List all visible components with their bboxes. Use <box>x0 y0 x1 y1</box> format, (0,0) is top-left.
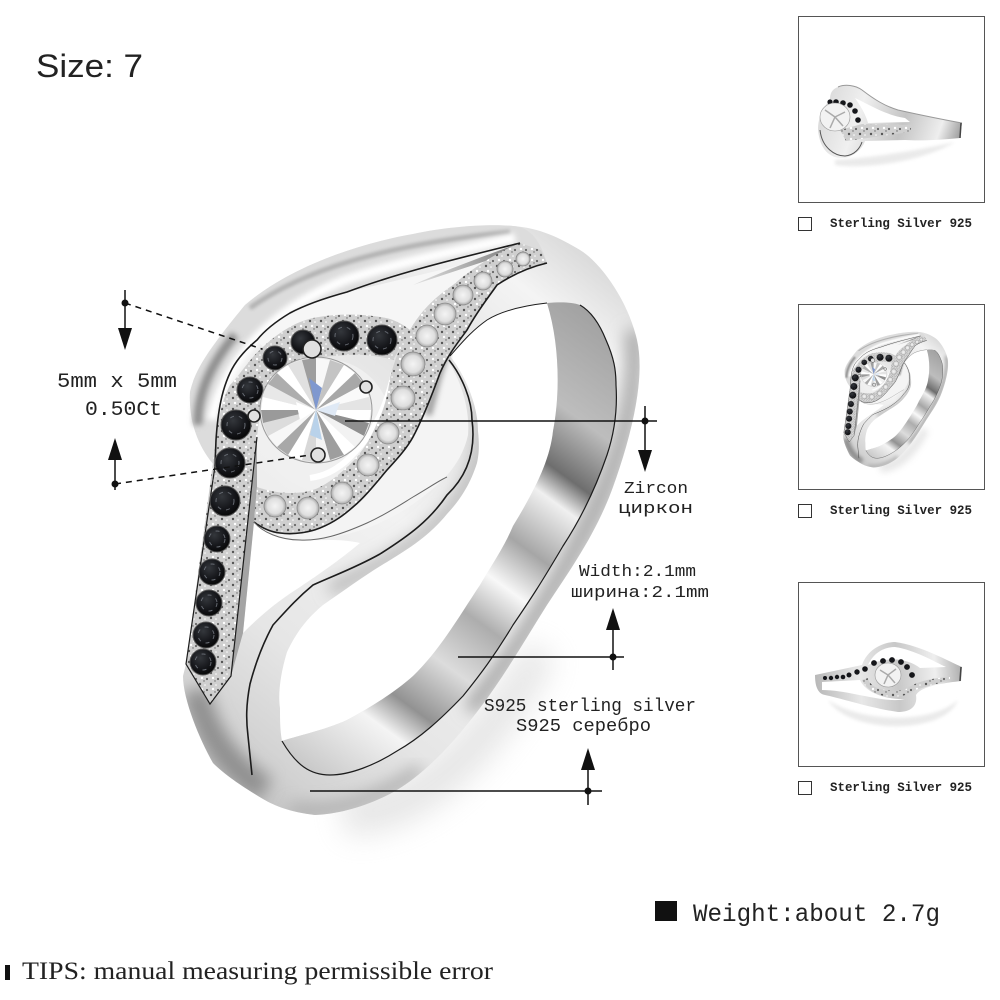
thumbnail 2: Sterling Silver 925 <box>830 504 972 518</box>
main ring illustration <box>183 225 640 835</box>
thumbnail 2 <box>798 304 984 518</box>
annotation: material <box>310 697 696 805</box>
annotation: zircon: Zircon <box>624 480 688 499</box>
annotation: stone dimensions: 5mm x 5mm <box>57 371 177 394</box>
annotation: zircon <box>345 406 693 519</box>
annotation: zircon: циркон <box>618 500 693 519</box>
annotation: band width <box>458 563 709 670</box>
weight note: Weight:about 2.7g <box>693 900 940 929</box>
thumbnail 1: Sterling Silver 925 <box>830 217 972 231</box>
annotation: stone dimensions: 0.50Ct <box>85 399 162 422</box>
annotation: stone dimensions <box>57 290 310 490</box>
title: ring size: Size: 7 <box>36 48 143 84</box>
annotation: band width: ширина:2.1mm <box>571 584 709 603</box>
thumbnail 1 <box>798 16 984 231</box>
thumbnail 3 <box>798 582 984 795</box>
tips note: TIPS: manual measuring permissible error <box>22 958 494 985</box>
annotation: material: S925 серебро <box>516 716 651 737</box>
annotation: material: S925 sterling silver <box>484 697 696 717</box>
annotation: band width: Width:2.1mm <box>579 563 696 582</box>
thumbnail 3: Sterling Silver 925 <box>830 781 972 795</box>
